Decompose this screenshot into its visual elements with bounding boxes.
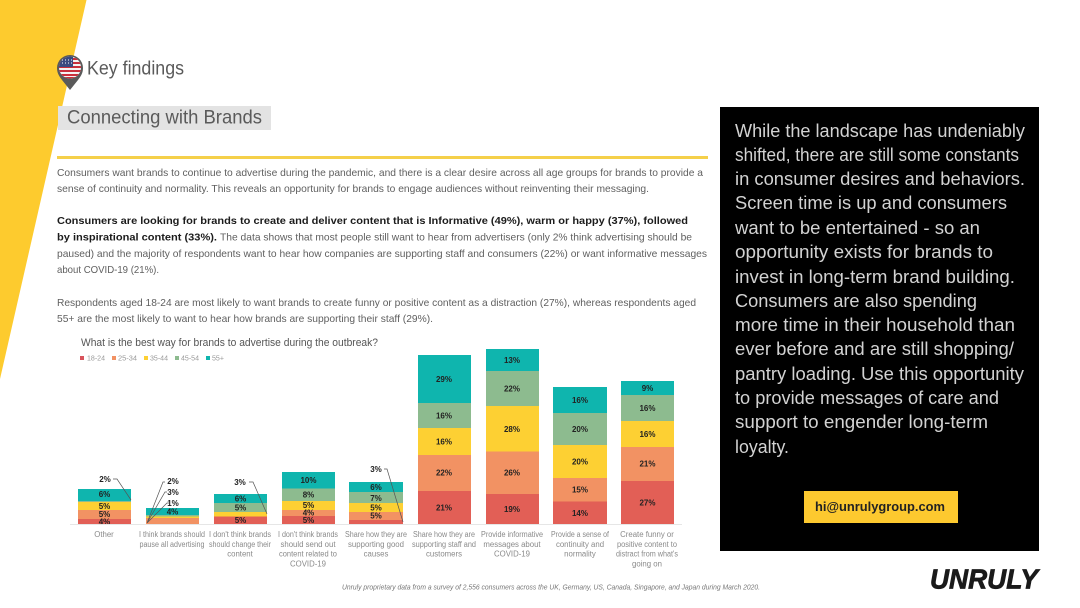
text block: summary: Consumers are also spending xyxy=(735,291,977,311)
bar: should change their content: 6% xyxy=(235,494,246,504)
chart category labels: distract from what's xyxy=(616,550,678,558)
text block: summary: want to be entertained - so an xyxy=(734,218,980,238)
text block: intro paragraph xyxy=(57,168,703,195)
bar: pause all advertising: 3% xyxy=(167,488,179,497)
chart category labels: Provide a sense of xyxy=(551,530,610,539)
bar: should not send content related to COVID-19: 5% xyxy=(303,516,314,525)
text block: summary: While the landscape has undeniably xyxy=(735,121,1025,141)
chart baseline xyxy=(70,524,682,525)
bar: funny or positive content: 27% xyxy=(639,498,656,508)
chart category labels: Create funny or xyxy=(620,530,674,539)
bar: pause all advertising: 4% xyxy=(167,508,178,516)
bar: Other: 6% xyxy=(99,490,110,499)
text block: key finding paragraph: Consumers are looking for brands to create and deliver content that is Informative (49%), warm or happy (37%), followed xyxy=(57,216,688,227)
bar: informative messages about COVID-19: 19% xyxy=(504,505,520,514)
bar: funny or positive content: 21% xyxy=(639,460,656,468)
bar: supporting good causes: 5% xyxy=(370,504,382,512)
text block: summary: in consumer desires and behaviors. xyxy=(735,169,1025,189)
chart category labels: COVID-19 xyxy=(494,550,530,558)
bar: informative messages about COVID-19: 22% xyxy=(504,384,520,394)
bar: should not send content related to COVID-19: 8% xyxy=(303,490,314,500)
bar: informative messages about COVID-19: 13% xyxy=(504,356,520,365)
panel: black summary callout xyxy=(720,107,1039,551)
bar: pause all advertising xyxy=(146,477,199,524)
bar: should not send content related to COVID-19: 4% xyxy=(303,508,314,518)
text block: summary: ever before and are still shopping/ xyxy=(735,339,1014,359)
text block: key finding paragraph: by inspirational content (33%). xyxy=(57,232,217,244)
bar: pause all advertising: 2% xyxy=(167,477,179,486)
chart category labels: positive content to xyxy=(617,540,678,549)
chart category labels: supporting staff and xyxy=(412,540,476,549)
text block: summary: Screen time is up and consumers xyxy=(735,193,1007,213)
bar: supporting good causes: 7% xyxy=(370,494,382,503)
bar: Other xyxy=(78,475,131,526)
bar: funny or positive content: 16% xyxy=(639,404,656,413)
bar: Other: 4% xyxy=(99,518,110,526)
chart category labels: COVID-19 xyxy=(290,560,326,568)
text block: intro paragraph: sense of continuity and normality. This reveals an opportunity for brands to engage audiences without reinventing their messaging. xyxy=(57,184,649,195)
text block: key finding paragraph: paused) and the majority of respondents want to hear how companies are supporting staff and consumers (22%) or want informative messages xyxy=(57,249,707,260)
bar: supporting staff and customers xyxy=(418,355,471,524)
chart legend: 55+ xyxy=(212,356,224,362)
bar: continuity and normality: 16% xyxy=(572,396,588,405)
bar: should change their content xyxy=(214,478,267,525)
heading: Connecting with Brands: Connecting with Brands xyxy=(67,106,262,128)
text block: summary: support to engender long-term xyxy=(735,412,988,432)
chart category labels xyxy=(94,530,678,568)
logo: UNRULY: UNRULY xyxy=(930,564,1040,594)
chart category labels: Share how they are xyxy=(413,530,475,539)
bar: informative messages about COVID-19: 28% xyxy=(504,425,520,434)
chart category labels: content xyxy=(227,550,254,558)
chart category labels: continuity and xyxy=(556,540,604,549)
chart title: What is the best way for brands to advertise during the outbreak? xyxy=(81,337,378,349)
bar: should change their content: 3% xyxy=(234,478,246,487)
text block: age group paragraph xyxy=(57,298,696,325)
chart legend xyxy=(80,356,224,362)
chart category labels: Share how they are xyxy=(345,530,407,539)
bar: supporting staff and customers: 16% xyxy=(436,412,452,420)
chart category labels: normality xyxy=(564,550,596,558)
email button: hi@unrulygroup.com xyxy=(815,499,945,514)
bar: should change their content: 5% xyxy=(235,516,246,525)
chart category labels: messages about xyxy=(483,540,541,549)
bar: supporting good causes: 5% xyxy=(370,512,382,520)
text block: summary: more time in their household than xyxy=(735,315,1015,335)
chart category labels: pause all advertising xyxy=(140,540,204,549)
heading: Key findings: Key findings xyxy=(87,58,184,80)
bar: informative messages about COVID-19: 26% xyxy=(504,468,520,478)
chart category labels: customers xyxy=(426,550,462,558)
chart category labels: supporting good xyxy=(348,540,404,549)
bar: supporting staff and customers: 29% xyxy=(436,375,452,384)
footnote: Unruly proprietary data from a survey of 2,556 consumers across the UK, Germany, US, Canada, Singapore, and Japan during March 2020. xyxy=(342,582,760,592)
chart category labels: should change their xyxy=(209,540,271,549)
email button xyxy=(804,491,958,523)
text block: summary: pantry loading. Use this opportunity xyxy=(735,364,1024,384)
chart legend: 18-24 xyxy=(87,356,105,362)
text block: key finding paragraph: The data shows that most people still want to hear from advertisers (only 2% think advertising should be xyxy=(220,232,692,244)
bar: should not send content related to COVID-19 xyxy=(282,472,335,525)
bar: funny or positive content: 16% xyxy=(639,430,656,439)
stacked bar chart xyxy=(78,349,674,526)
bar: Other: 5% xyxy=(99,502,110,511)
bar: should not send content related to COVID-19: 10% xyxy=(300,476,317,485)
bar: supporting good causes: 3% xyxy=(370,465,382,474)
bar: continuity and normality xyxy=(553,387,607,524)
text block: summary: opportunity exists for brands to xyxy=(735,242,993,262)
bar: should change their content: 5% xyxy=(235,504,246,512)
bar: supporting staff and customers: 21% xyxy=(436,504,452,512)
chart legend: 35-44 xyxy=(150,356,168,362)
bar: supporting staff and customers: 16% xyxy=(436,438,452,446)
bar: Other: 5% xyxy=(99,510,110,519)
chart category labels: I don't think brands xyxy=(209,530,271,539)
text block: summary: loyalty. xyxy=(735,437,789,457)
chart category labels: I think brands should xyxy=(139,530,205,539)
text block: age group paragraph: Respondents aged 18-24 are most likely to want brands to create funny or positive content as a distraction (27%), whereas respondents aged xyxy=(57,298,696,309)
text block: summary: invest in long-term brand building. xyxy=(735,267,1015,287)
bar: continuity and normality: 15% xyxy=(572,486,588,494)
yellow rule xyxy=(57,156,708,159)
text block: key finding paragraph: about COVID-19 (21%). xyxy=(57,265,159,276)
chart category labels: Other xyxy=(94,530,114,539)
text block: intro paragraph: Consumers want brands to continue to advertise during the pandemic, and there is a clear desire across all age groups for brands to provide a xyxy=(57,168,703,179)
chart category labels: going on xyxy=(632,560,662,568)
bar: continuity and normality: 20% xyxy=(572,425,588,434)
text block: summary xyxy=(734,121,1025,457)
chart category labels: should send out xyxy=(280,540,336,549)
bar: informative messages about COVID-19 xyxy=(486,349,539,524)
bar: supporting good causes xyxy=(349,465,403,524)
bar: continuity and normality: 20% xyxy=(572,458,588,466)
bar: pause all advertising: 1% xyxy=(167,499,179,508)
icon: US flag map pin xyxy=(57,55,83,90)
text block: summary: shifted, there are still some constants xyxy=(735,145,1019,165)
text block: summary: to provide messages of care and xyxy=(735,388,999,408)
text block: age group paragraph: 55+ are the most likely to want to hear how brands are supporting their staff (29%). xyxy=(57,314,433,325)
chart category labels: I don't think brands xyxy=(278,530,338,539)
bar: funny or positive content xyxy=(621,381,674,524)
chart category labels: causes xyxy=(364,550,388,558)
text block: key finding paragraph xyxy=(57,216,707,276)
bar: Other: 2% xyxy=(99,475,111,484)
bar: funny or positive content: 9% xyxy=(642,384,653,393)
yellow corner wedge xyxy=(0,0,86,379)
chart category labels: Provide informative xyxy=(481,530,543,539)
chart legend: 45-54 xyxy=(181,356,199,362)
bar: supporting good causes: 6% xyxy=(370,483,382,492)
chart category labels: content related to xyxy=(279,550,338,558)
chart legend: 25-34 xyxy=(118,356,137,362)
bar: supporting staff and customers: 22% xyxy=(436,468,452,478)
bar: should not send content related to COVID-19: 5% xyxy=(303,501,314,510)
bar: continuity and normality: 14% xyxy=(572,509,588,518)
